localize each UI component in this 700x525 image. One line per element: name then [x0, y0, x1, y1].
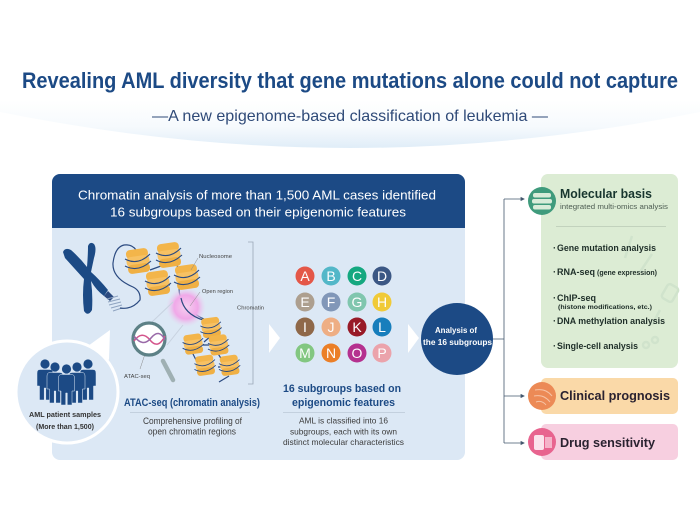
panel: drug sensitivity — [528, 424, 678, 460]
labels: chromatin: ATAC-seq — [124, 374, 150, 380]
subgroup circles: E — [300, 294, 310, 310]
panel: drug sensitivity: Drug sensitivity — [560, 435, 656, 450]
labels: chromatin: Chromatin — [237, 306, 264, 312]
ATAC-seq description: Comprehensive profiling of — [143, 416, 243, 426]
icon: patients — [37, 359, 96, 405]
subgroup circles: K — [352, 319, 362, 335]
subgroup circles: P — [377, 345, 387, 361]
subgroup circles — [296, 266, 392, 362]
panel: molecular basis — [528, 174, 679, 368]
subgroups heading: epigenomic features — [292, 397, 395, 409]
omics list: · — [553, 267, 556, 278]
subgroups heading — [283, 383, 401, 409]
icon: magnifier — [133, 323, 173, 380]
patient samples circle: (More than 1,500) — [36, 422, 95, 431]
subgroup circles: O — [352, 345, 363, 361]
icon: drug — [528, 428, 556, 456]
subgroup circles: I — [303, 319, 307, 335]
omics list: (histone modifications, etc.) — [558, 304, 652, 311]
omics list: (gene expression) — [597, 270, 657, 277]
omics list: · — [553, 341, 556, 352]
white arrow 2 — [408, 324, 419, 353]
ATAC-seq description: open chromatin regions — [148, 426, 237, 436]
icon: prognosis — [528, 382, 556, 410]
patient samples circle: AML patient samples — [29, 410, 101, 419]
analysis circle — [421, 303, 493, 375]
omics list: · — [553, 293, 556, 304]
omics list: RNA-seq — [557, 267, 595, 278]
subgroups description: AML is classified into 16 — [299, 416, 388, 426]
labels: chromatin: Open region — [202, 289, 233, 295]
ATAC-seq heading: ATAC-seq (chromatin analysis) — [124, 397, 260, 409]
omics list: ChIP-seq — [557, 293, 596, 304]
panel: chromatin analysis — [52, 174, 465, 460]
icon: layers — [528, 187, 556, 215]
header background swoosh — [0, 100, 700, 148]
panel: clinical prognosis: Clinical prognosis — [560, 388, 670, 403]
subgroup circles: M — [299, 345, 311, 361]
panel: molecular basis: Molecular basis — [560, 186, 652, 201]
analysis circle: Analysis of — [435, 325, 477, 335]
subgroup circles: B — [326, 268, 336, 284]
omics list — [553, 243, 665, 352]
ATAC-seq description — [143, 416, 243, 436]
labels: chromatin — [124, 242, 264, 384]
subgroup circles: A — [300, 268, 310, 284]
connector arrows — [493, 198, 524, 444]
omics list: DNA methylation analysis — [557, 316, 665, 327]
subgroup circles: F — [327, 294, 335, 310]
patient samples circle — [16, 330, 118, 443]
omics list: Single-cell analysis — [557, 341, 638, 352]
omics list: · — [553, 243, 556, 254]
white arrow 1 — [269, 324, 280, 353]
panel header: Chromatin analysis of more than 1,500 AML cases identified — [78, 188, 436, 202]
panel header: 16 subgroups based on their epigenomic features — [110, 204, 407, 220]
faint chromatin decoration — [625, 236, 679, 348]
panel header — [52, 174, 465, 228]
subgroup circles: J — [328, 319, 334, 335]
subgroup circles: D — [377, 268, 387, 284]
subgroup circles: C — [352, 268, 362, 284]
subgroup circles: N — [326, 345, 336, 361]
labels: chromatin: Nucleosome — [199, 254, 232, 260]
subgroups heading: 16 subgroups based on — [283, 383, 401, 395]
icon: chromosome — [63, 243, 122, 314]
subgroup circles: H — [377, 294, 387, 310]
subgroups description: distinct molecular characteristics — [283, 437, 404, 447]
panel: molecular basis: integrated multi-omics analysis — [560, 202, 668, 211]
omics list: · — [553, 316, 556, 327]
subgroups description: subgroups, each with its own — [290, 426, 397, 436]
glow: open region — [166, 287, 206, 327]
magnifier rays — [152, 302, 183, 345]
subgroup circles: L — [378, 319, 386, 335]
subtitle: —A new epigenome-based classification of leukemia — — [152, 108, 548, 125]
panel: clinical prognosis — [528, 378, 678, 414]
subgroup circles: G — [352, 294, 362, 310]
DNA strand — [113, 245, 229, 382]
nucleosomes — [125, 242, 240, 376]
analysis circle: the 16 subgroups — [423, 337, 492, 347]
subgroups description — [283, 416, 404, 447]
omics list: Gene mutation analysis — [557, 243, 656, 254]
